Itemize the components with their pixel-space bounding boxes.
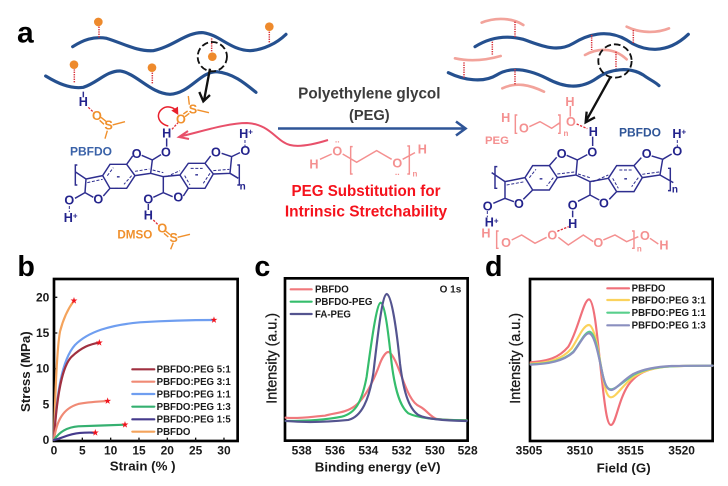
panel letter c: c	[254, 251, 270, 283]
c legend	[291, 285, 462, 320]
panel letter b: b	[17, 251, 35, 283]
right PBFDO molecule with PEG: O	[593, 236, 603, 250]
b axis titles: Strain (% )	[110, 459, 176, 474]
PEG formula: H	[309, 157, 319, 171]
panel letter a: a	[17, 16, 34, 50]
right PBFDO molecule with PEG: -	[624, 172, 628, 184]
right PBFDO molecule with PEG: O	[672, 145, 682, 159]
panel b: stress-strain chart	[17, 251, 238, 474]
d curves	[531, 299, 713, 425]
b axis titles: Stress (MPa)	[18, 331, 33, 412]
red caption: Intrinsic Stretchability	[285, 204, 448, 221]
PEG formula: n	[413, 170, 418, 179]
left PBFDO molecule with DMSO: O	[173, 191, 183, 205]
right PBFDO molecule with PEG: O	[501, 236, 511, 250]
label PBFDO left: PBFDO	[70, 145, 112, 159]
left PBFDO molecule with DMSO: H	[64, 211, 73, 225]
left PBFDO molecule with DMSO: S	[189, 102, 197, 116]
left PBFDO molecule with DMSO: S	[169, 231, 178, 245]
b tick labels: 15	[132, 444, 146, 458]
d legend: PBFDO:PEG 1:3	[632, 321, 706, 332]
left PBFDO molecule with DMSO: n	[240, 181, 246, 192]
PEG heading: (PEG)	[349, 108, 390, 124]
b legend: PBFDO:PEG 5:1	[157, 365, 231, 376]
PEG formula: H	[418, 142, 427, 156]
left PBFDO molecule with DMSO: O	[92, 109, 102, 123]
b tick labels: 5	[79, 444, 86, 458]
d frame	[530, 279, 713, 441]
arrow: zoom to left structure	[199, 69, 210, 101]
right PBFDO molecule with PEG: n	[564, 129, 569, 138]
b legend: PBFDO	[157, 427, 191, 438]
c legend: PBFDO-PEG	[315, 297, 372, 308]
right PBFDO molecule with PEG: O	[642, 147, 652, 161]
left PBFDO molecule with DMSO: H	[162, 127, 171, 141]
right PBFDO molecule with PEG: O	[483, 199, 493, 213]
left PBFDO molecule with DMSO: H	[239, 127, 248, 141]
left PBFDO molecule with DMSO: H	[79, 95, 88, 109]
right PBFDO molecule with PEG: H	[565, 95, 575, 109]
b axis titles	[18, 331, 176, 474]
right PBFDO molecule with PEG: O	[568, 198, 578, 212]
c frame	[285, 278, 468, 441]
left PBFDO molecule with DMSO: +	[248, 128, 253, 137]
left PBFDO molecule with DMSO: O	[240, 144, 250, 158]
right PBFDO molecule with PEG: O	[547, 228, 557, 242]
b legend	[132, 365, 231, 438]
right PBFDO molecule with PEG: -	[539, 172, 543, 184]
label PBFDO right: PBFDO	[619, 126, 661, 140]
right PBFDO molecule with PEG: +	[682, 128, 687, 137]
PEG formula: ..	[395, 167, 400, 177]
right PBFDO molecule with PEG: H	[589, 125, 598, 139]
b tick labels: 10	[36, 362, 50, 376]
panel d: EPR chart	[485, 251, 713, 476]
right PBFDO molecule with PEG: H	[481, 227, 491, 241]
b tick labels: 0	[43, 433, 50, 447]
right PBFDO molecule with PEG: O	[557, 147, 567, 161]
left PBFDO molecule with DMSO	[64, 92, 253, 249]
b legend: PBFDO:PEG 1:5	[157, 415, 231, 426]
right PBFDO molecule with PEG: n	[637, 244, 642, 253]
right PBFDO molecule with PEG: H	[485, 216, 494, 230]
d axis titles: Field (G)	[597, 461, 651, 476]
right PBFDO molecule with PEG: O	[566, 115, 576, 129]
left PBFDO molecule with DMSO: O	[93, 192, 103, 206]
b tick labels: 30	[217, 444, 231, 458]
left PBFDO molecule with DMSO: O	[143, 192, 153, 206]
d tick labels: 3520	[668, 444, 695, 458]
left PBFDO molecule with DMSO: O	[132, 147, 142, 161]
left PBFDO molecule with DMSO: O	[176, 113, 186, 127]
c axis titles: Intensity (a.u.)	[265, 313, 281, 404]
right PBFDO molecule with PEG: n	[672, 185, 678, 196]
red caption: PEG Substitution for	[291, 183, 441, 200]
c tick labels: 536	[325, 444, 345, 458]
d tick labels: 3510	[567, 444, 594, 458]
c tick labels: 534	[358, 444, 379, 458]
b legend: PBFDO:PEG 1:3	[157, 402, 231, 413]
right polymer chains with PEG	[448, 19, 688, 122]
c tick labels	[292, 444, 478, 458]
d legend: PBFDO	[632, 284, 666, 295]
b tick labels: 0	[51, 444, 58, 458]
right PBFDO molecule with PEG: O	[514, 197, 524, 211]
c legend: FA-PEG	[315, 309, 351, 320]
right PBFDO molecule with PEG: +	[494, 216, 499, 225]
b tick labels: 20	[36, 290, 50, 304]
left PBFDO molecule with DMSO: S	[104, 118, 113, 132]
left PBFDO molecule with DMSO: O	[157, 222, 167, 236]
PEG formula: ..	[335, 135, 340, 145]
d legend	[607, 284, 706, 332]
left PBFDO molecule with DMSO: H	[144, 208, 153, 222]
b tick labels: 20	[161, 444, 174, 458]
PEG formula: O	[392, 156, 402, 170]
left PBFDO molecule with DMSO: O	[161, 146, 171, 160]
d legend: PBFDO:PEG 1:1	[632, 308, 706, 319]
PEG formula	[309, 135, 427, 179]
c axis titles	[265, 313, 441, 474]
PEG heading	[298, 85, 440, 124]
b tick labels: 15	[36, 326, 50, 340]
PEG formula: O	[332, 145, 342, 159]
panel c: XPS O 1s chart	[254, 251, 478, 474]
d legend: PBFDO:PEG 3:1	[632, 295, 706, 306]
d axis titles	[508, 313, 651, 476]
c tick labels: 528	[458, 444, 478, 458]
b tick labels: 10	[104, 444, 118, 458]
b legend: PBFDO:PEG 1:1	[157, 389, 231, 400]
right PBFDO molecule with PEG: O	[640, 229, 650, 243]
right PBFDO molecule with PEG: H	[568, 217, 577, 231]
b frame and ticks	[54, 279, 238, 441]
left polymer chains with DMSO side groups	[46, 18, 286, 94]
b curves	[54, 297, 217, 440]
d axis titles: Intensity (a.u.)	[508, 313, 524, 404]
left PBFDO molecule with DMSO: +	[73, 212, 78, 221]
right PBFDO molecule with PEG: O	[587, 146, 597, 160]
pink curved arrow	[179, 123, 328, 146]
b tick labels	[36, 290, 231, 458]
c tick labels: 538	[292, 444, 312, 458]
left PBFDO molecule with DMSO: -	[117, 170, 121, 182]
right PBFDO molecule with PEG	[481, 95, 687, 253]
right PBFDO molecule with PEG: O	[599, 196, 609, 210]
c legend: PBFDO	[315, 285, 349, 296]
left PBFDO molecule with DMSO: O	[211, 146, 221, 160]
d tick labels: 3515	[617, 444, 644, 458]
blue reaction arrow	[278, 122, 466, 136]
c curves	[286, 294, 467, 422]
b tick labels: 25	[189, 444, 203, 458]
d tick labels: 3505	[516, 444, 543, 458]
b tick labels: 5	[43, 397, 50, 411]
right PBFDO molecule with PEG: O	[519, 122, 529, 136]
panel a: PEG substitution schematic	[17, 16, 688, 253]
red caption	[285, 183, 448, 221]
right PBFDO molecule with PEG: H	[672, 127, 682, 141]
label PEG: PEG	[485, 135, 509, 147]
d tick labels	[516, 444, 695, 458]
panel letter d: d	[485, 251, 503, 283]
b legend: PBFDO:PEG 3:1	[157, 377, 231, 388]
right PBFDO molecule with PEG: H	[659, 238, 669, 252]
left PBFDO molecule with DMSO: -	[195, 169, 199, 181]
c tick labels: 530	[425, 444, 445, 458]
c tick labels: 532	[392, 444, 412, 458]
label DMSO: DMSO	[117, 229, 152, 242]
c legend: O 1s	[440, 285, 462, 296]
left PBFDO molecule with DMSO: O	[64, 193, 74, 207]
PEG heading: Polyethylene glycol	[298, 85, 440, 102]
c axis titles: Binding energy (eV)	[315, 459, 441, 474]
right PBFDO molecule with PEG: H	[501, 111, 510, 125]
